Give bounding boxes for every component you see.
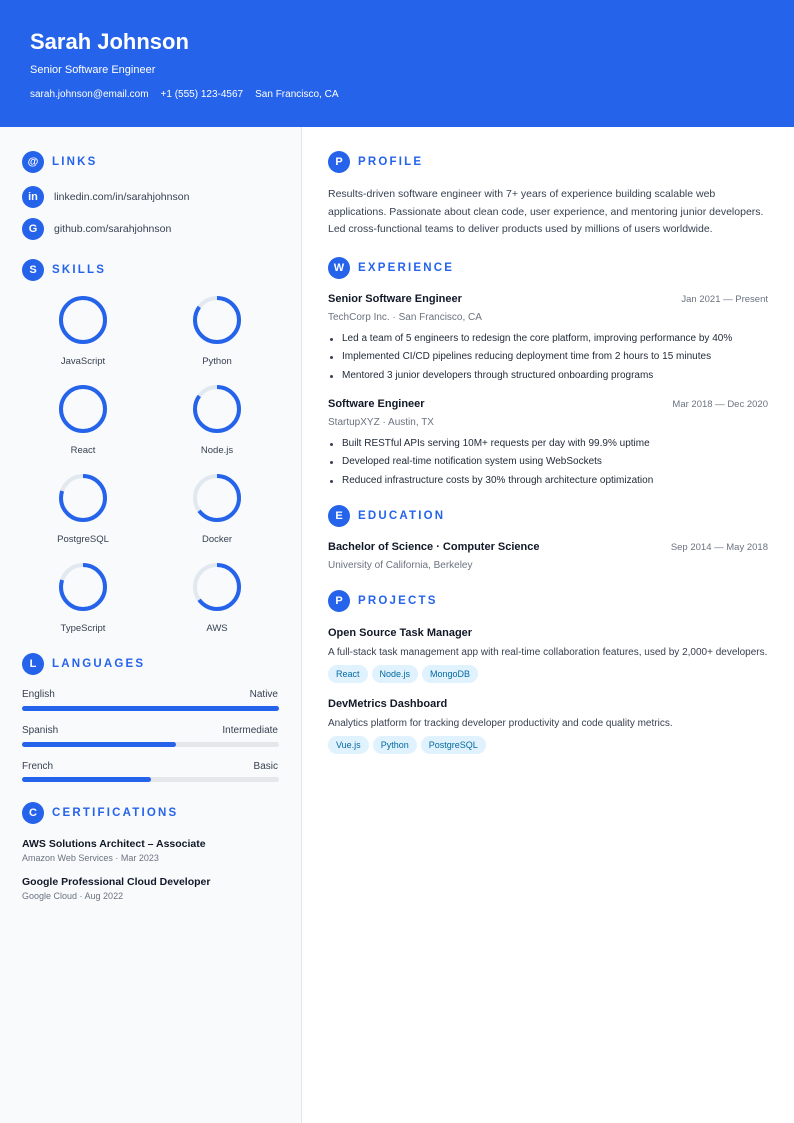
skills chart: React — [71, 445, 96, 456]
education heading: E — [335, 510, 343, 522]
project 2: Vue.js — [336, 740, 361, 750]
links heading: LINKS — [52, 156, 98, 168]
skills chart: PostgreSQL — [57, 534, 109, 545]
contact info: sarah.johnson@email.com +1 (555) 123-4567 San Francisco, CA — [30, 89, 338, 100]
experience heading: EXPERIENCE — [358, 262, 454, 274]
job 2 — [328, 398, 768, 428]
education heading — [328, 505, 445, 527]
languages heading — [22, 653, 145, 675]
main column — [328, 151, 763, 235]
languages list: Spanish — [22, 725, 58, 736]
text: Reduced infrastructure costs by 30% through architecture optimization — [342, 475, 653, 486]
certifications heading: CERTIFICATIONS — [52, 807, 178, 819]
certifications list: Amazon Web Services · Mar 2023 — [22, 853, 159, 863]
certifications list: AWS Solutions Architect – Associate — [22, 838, 206, 850]
education entry: Bachelor of Science · Computer Science — [328, 541, 540, 553]
job 1 — [328, 293, 768, 323]
skills chart: Docker — [202, 534, 232, 545]
project 1: React — [336, 669, 360, 679]
text: Mentored 3 junior developers through structured onboarding programs — [342, 370, 653, 381]
job 1: TechCorp Inc. · San Francisco, CA — [328, 312, 482, 323]
certifications heading: C — [29, 807, 37, 819]
link: github: github.com/sarahjohnson — [54, 223, 171, 235]
project 1 — [328, 627, 767, 683]
skills chart — [57, 296, 241, 634]
job 2: Software Engineer — [328, 398, 425, 410]
skills chart: JavaScript — [61, 356, 106, 367]
education entry: University of California, Berkeley — [328, 560, 472, 571]
profile heading — [328, 151, 423, 173]
project 2: Python — [381, 740, 409, 750]
project 1: A full-stack task management app with real-time collaboration features, used by 2,000+ developers. — [328, 647, 767, 658]
project 1: MongoDB — [430, 669, 470, 679]
profile text: Results-driven software engineer with 7+ years of experience building scalable web applications. Passionate about clean code, user experience, and mentoring junior developers. Led cross-functional teams to deliver products used by millions of users worldwide. — [328, 188, 763, 235]
experience heading: W — [334, 262, 344, 274]
job 2: Mar 2018 — Dec 2020 — [672, 399, 768, 410]
links heading: @ — [28, 156, 38, 168]
languages heading: L — [30, 658, 36, 670]
languages list: Basic — [254, 761, 278, 772]
projects heading: PROJECTS — [358, 595, 438, 607]
link: linkedin: in — [28, 191, 38, 203]
skills chart: Node.js — [201, 445, 233, 456]
skills heading: S — [29, 264, 37, 276]
links heading — [22, 151, 189, 240]
project 2: PostgreSQL — [429, 740, 478, 750]
languages list — [22, 689, 279, 782]
link: github — [22, 218, 171, 240]
profile heading: PROFILE — [358, 156, 423, 168]
text: Implemented CI/CD pipelines reducing deployment time from 2 hours to 15 minutes — [342, 351, 711, 362]
text: Built RESTful APIs serving 10M+ requests per day with 99.9% uptime — [342, 438, 650, 449]
certifications list: Google Cloud · Aug 2022 — [22, 891, 123, 901]
header — [0, 0, 794, 127]
projects heading — [328, 590, 438, 612]
job 1: Senior Software Engineer — [328, 293, 462, 305]
certifications list: Google Professional Cloud Developer — [22, 876, 210, 888]
projects heading: P — [335, 595, 343, 607]
link: linkedin — [22, 186, 189, 208]
job 1: Jan 2021 — Present — [681, 294, 768, 305]
project 2: Analytics platform for tracking developer productivity and code quality metrics. — [328, 718, 673, 729]
profile heading: P — [335, 156, 343, 168]
link: github: G — [29, 223, 37, 235]
certifications list — [22, 838, 210, 901]
project 2: DevMetrics Dashboard — [328, 698, 447, 710]
certifications heading — [22, 802, 178, 824]
project 1: Open Source Task Manager — [328, 627, 472, 639]
project 1: Node.js — [380, 669, 410, 679]
languages list: Native — [250, 689, 278, 700]
experience heading — [328, 257, 454, 279]
skills heading: SKILLS — [52, 264, 106, 276]
link: linkedin: linkedin.com/in/sarahjohnson — [54, 191, 189, 203]
skills chart: Python — [202, 356, 232, 367]
languages list: Intermediate — [222, 725, 278, 736]
skills heading — [22, 259, 106, 281]
skills chart: AWS — [206, 623, 228, 634]
languages list: English — [22, 689, 55, 700]
education entry: Sep 2014 — May 2018 — [671, 542, 768, 553]
education entry — [328, 541, 768, 571]
skills chart: TypeScript — [61, 623, 106, 634]
job title: Senior Software Engineer — [30, 64, 155, 76]
education heading: EDUCATION — [358, 510, 445, 522]
languages heading: LANGUAGES — [52, 658, 145, 670]
sidebar — [0, 127, 302, 1123]
text: Led a team of 5 engineers to redesign the core platform, improving performance by 40% — [342, 333, 732, 344]
text: Developed real-time notification system using WebSockets — [342, 456, 602, 467]
project 2 — [328, 698, 673, 754]
name: Sarah Johnson — [30, 29, 189, 54]
languages list: French — [22, 761, 53, 772]
job 2: StartupXYZ · Austin, TX — [328, 417, 434, 428]
